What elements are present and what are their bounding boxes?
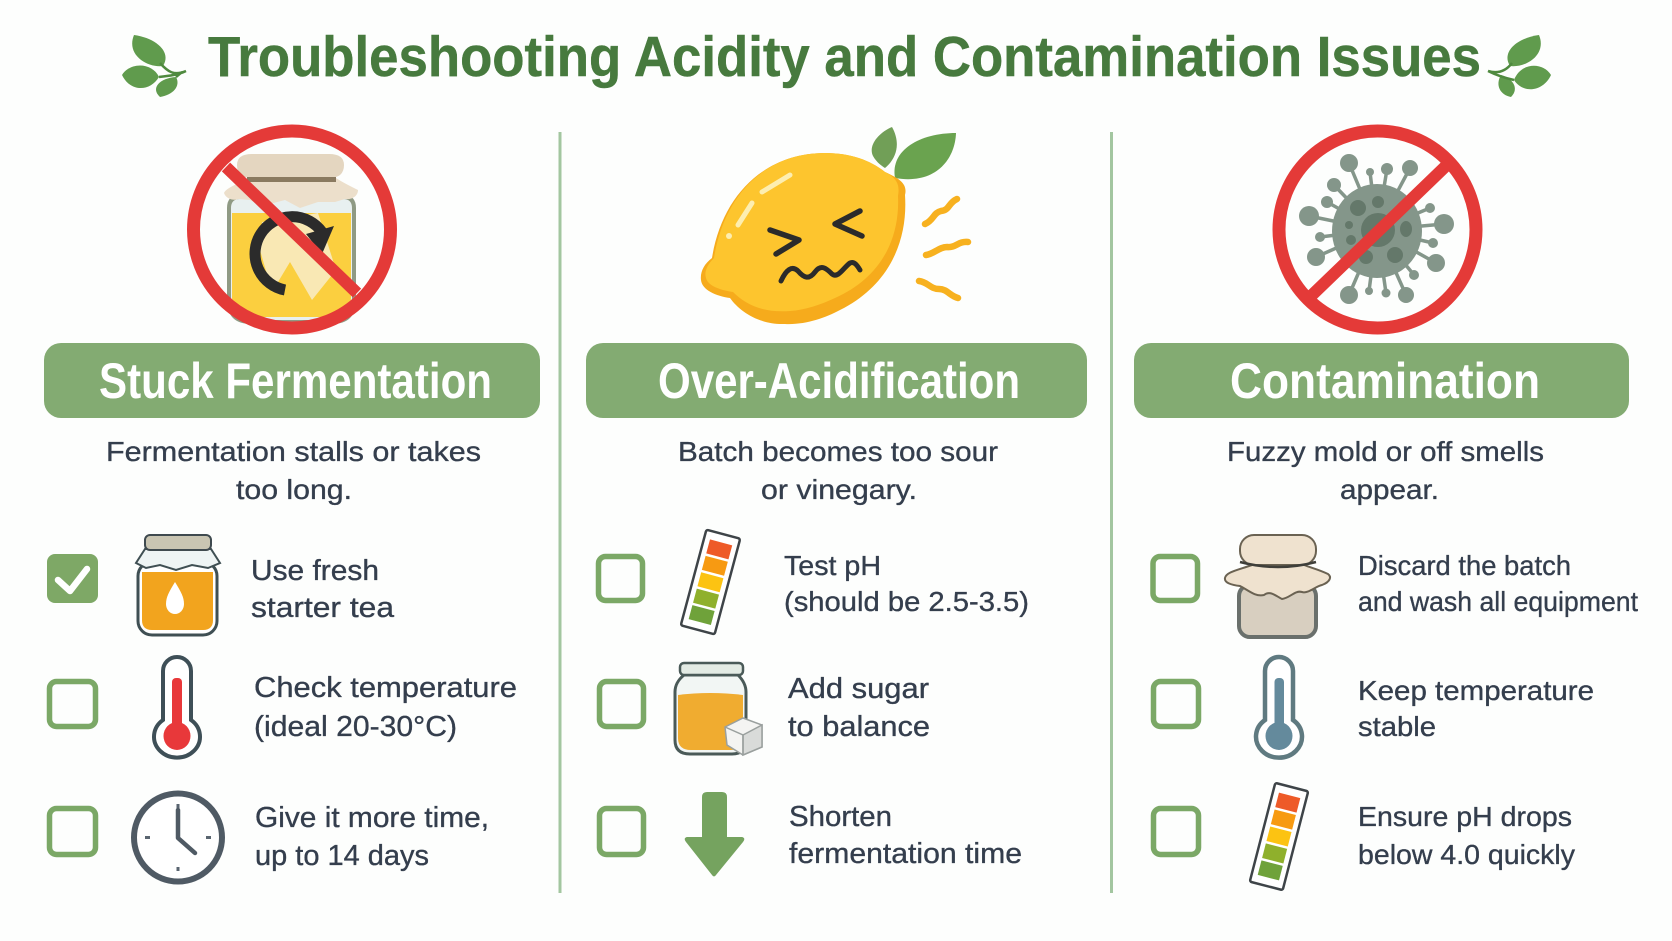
text: starter tea [251,592,395,624]
checkbox [1153,556,1198,600]
text: Ensure pH drops [1358,801,1572,832]
text [251,555,395,624]
text: and wash all equipment [1358,586,1638,617]
checklist item: add sugar [600,663,930,755]
icon: right leaves [1488,35,1551,97]
checklist item: ensure pH [1154,783,1575,890]
description [106,436,481,505]
panel: contamination [1134,131,1638,890]
checklist item: discard [1153,535,1638,637]
checkbox [600,682,644,726]
text: to balance [788,711,930,743]
description: appear. [1340,474,1439,505]
description: Batch becomes too sour [678,436,998,467]
text: Check temperature [254,672,517,704]
text: fermentation time [789,838,1022,870]
icon: no-go virus [1279,131,1476,328]
checklist item: keep temperature [1154,657,1594,758]
checklist item: time [50,794,489,882]
text: up to 14 days [255,840,429,872]
text: Keep temperature [1358,675,1594,706]
heading pill: over-acidification [586,343,1087,418]
title: Troubleshooting Acidity and Contamination Issues [208,25,1481,89]
text [1358,675,1594,742]
checklist item: starter tea [47,535,395,635]
text: (should be 2.5-3.5) [784,586,1029,617]
icon: jar with sugar cube [675,663,762,755]
column divider 1 [558,132,562,893]
description: too long. [236,474,352,505]
heading pill: contamination [1134,343,1629,418]
text [784,550,1029,617]
heading pill: over-acidification: Over-Acidification [658,353,1020,409]
text: (ideal 20-30°C) [254,711,457,743]
icon: jar with drop [136,535,220,635]
icon: sour lemon [701,127,968,324]
text: Add sugar [788,673,929,705]
checklist item: test pH [598,530,1029,634]
icon: blue thermometer [1256,657,1302,758]
text: Discard the batch [1358,550,1571,581]
text: below 4.0 quickly [1358,839,1575,870]
checkbox [600,808,644,854]
icon: covered jar [1225,535,1330,637]
checkbox [1154,682,1198,726]
icon: down arrow [685,792,744,876]
icon: no-go jar with stalled arrow [194,131,390,328]
text [789,801,1022,870]
checkbox [50,808,96,854]
icon: pH strip [681,530,740,634]
checkbox [598,556,642,600]
checklist item: temperature [50,657,517,758]
checkbox checked [47,554,98,603]
heading pill: contamination: Contamination [1230,353,1540,409]
checkbox [1154,808,1198,854]
text [1358,801,1575,870]
column divider 2 [1110,132,1113,893]
icon: clock [134,794,222,882]
icon: red thermometer [154,657,200,758]
text: Test pH [784,550,881,581]
description [678,436,998,505]
checkbox [50,682,96,726]
panel: over-acidification [586,127,1087,876]
text: Use fresh [251,555,379,587]
heading pill: stuck fermentation [44,343,540,418]
text [1358,550,1638,617]
description: or vinegary. [761,474,917,505]
icon: left leaves [122,35,186,97]
description: Fermentation stalls or takes [106,436,481,467]
checklist item: shorten time [600,792,1022,876]
text: Shorten [789,801,892,833]
text: Give it more time, [255,802,489,834]
description: Fuzzy mold or off smells [1227,436,1544,467]
text [255,802,489,872]
panel: stuck fermentation [44,131,540,882]
heading pill: stuck fermentation: Stuck Fermentation [99,353,492,409]
text: stable [1358,711,1436,742]
text [254,672,517,743]
icon: pH strip [1250,783,1308,890]
text [788,673,930,743]
description [1227,436,1544,505]
